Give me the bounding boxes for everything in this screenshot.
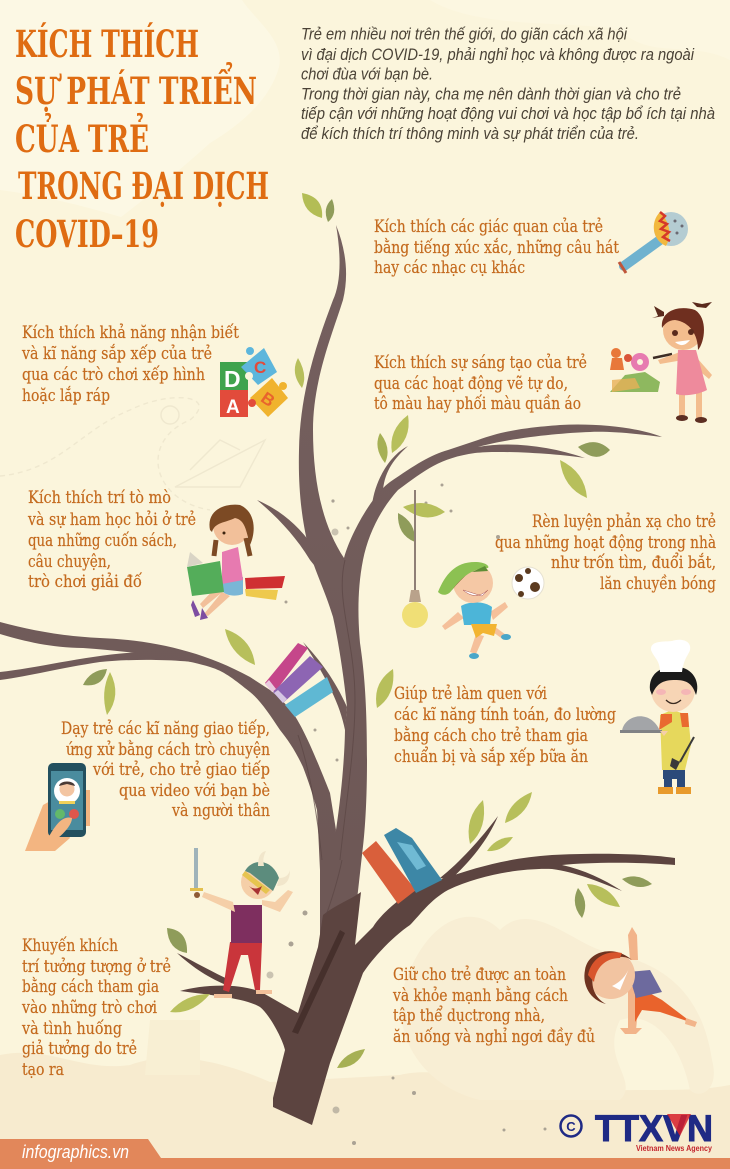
illustration: boy with ball — [438, 562, 544, 659]
title: SỰ PHÁT TRIỂN — [15, 62, 257, 113]
logo: copyright — [560, 1116, 582, 1136]
text: imagination: trí tưởng tượng ở trẻ — [22, 957, 171, 976]
text: creativity — [374, 353, 587, 413]
text: senses: hay các nhạc cụ khác — [374, 258, 525, 277]
logo: copyright: C — [566, 1119, 576, 1134]
icon: puzzle: C — [254, 358, 266, 377]
icon: phone call — [25, 763, 90, 851]
text: curiosity: Kích thích trí tò mò — [28, 488, 171, 507]
illustration: chef — [620, 640, 697, 794]
text: communication: qua video với bạn bè — [119, 781, 270, 800]
text: imagination: giả tưởng do trẻ — [22, 1039, 137, 1058]
text: curiosity — [27, 488, 196, 591]
text: maths: các kĩ năng tính toán, đo lường — [394, 705, 616, 724]
text: imagination: Khuyến khích — [22, 936, 118, 955]
text: imagination — [21, 936, 171, 1079]
text: reflexes — [495, 512, 716, 593]
illustration: stack of books upper — [265, 643, 333, 717]
text: health: Giữ cho trẻ được an toàn — [393, 965, 566, 984]
intro text: chơi đùa với bạn bè. — [301, 66, 433, 84]
intro text: để kích thích trí thông minh và sự phát triển của trẻ. — [301, 125, 639, 143]
logo: TTXVN: Vietnam News Agency — [636, 1144, 712, 1153]
text: puzzles — [21, 323, 239, 405]
footer bar: infographics.vn — [22, 1141, 129, 1162]
text: maths: bằng cách cho trẻ tham gia — [394, 726, 588, 745]
text: puzzles: và kĩ năng sắp xếp của trẻ — [21, 344, 212, 363]
leaves — [83, 193, 652, 1068]
footer bar — [0, 1139, 730, 1169]
text: imagination: bằng cách tham gia — [22, 977, 159, 996]
title: CỦA TRẺ — [15, 113, 149, 161]
text: curiosity: qua những cuốn sách, — [28, 531, 177, 550]
text: curiosity: và sự ham học hỏi ở trẻ — [27, 510, 196, 529]
text: maths: chuẩn bị và sắp xếp bữa ăn — [394, 747, 588, 766]
illustration: exercising kid — [584, 927, 697, 1034]
illustration: reading girl — [187, 505, 285, 620]
text: communication: với trẻ, cho trẻ giao tiếp — [92, 760, 270, 779]
intro text: vì đại dịch COVID-19, phải nghỉ học và không được ra ngoài — [301, 46, 695, 64]
tree — [0, 225, 675, 1125]
icon: puzzle — [220, 347, 288, 418]
text: health: tập thể dụctrong nhà, — [393, 1006, 545, 1025]
text: puzzles: Kích thích khả năng nhận biết — [22, 323, 239, 342]
text: communication: Dạy trẻ các kĩ năng giao tiếp, — [61, 719, 270, 738]
icon: puzzle: D — [224, 366, 241, 392]
title — [15, 22, 269, 256]
intro text: Trẻ em nhiều nơi trên thế giới, do giãn cách xã hội — [301, 26, 628, 44]
text: creativity: tô màu hay phối màu quần áo — [374, 394, 581, 413]
text: communication — [61, 719, 270, 820]
text: imagination: và tình huống — [21, 1019, 122, 1038]
icon: puzzle: A — [226, 397, 240, 418]
intro text: Trong thời gian này, cha mẹ nên dành thời gian và cho trẻ — [301, 86, 681, 104]
text: communication: và người thân — [171, 801, 270, 820]
icon: rattle — [619, 212, 688, 273]
illustration: viking boy — [190, 848, 293, 998]
text: curiosity: trò chơi giải đố — [28, 572, 143, 591]
text: curiosity: câu chuyện, — [28, 552, 111, 571]
text: senses — [374, 217, 619, 277]
intro text — [301, 26, 715, 143]
illustration: stack of books lower — [362, 828, 442, 904]
text: health: ăn uống và nghỉ ngơi đầy đủ — [393, 1027, 595, 1046]
text: imagination: tạo ra — [22, 1060, 64, 1079]
text: creativity: Kích thích sự sáng tạo của trẻ — [374, 353, 587, 372]
text: puzzles: hoặc lắp ráp — [22, 386, 110, 405]
title: KÍCH THÍCH — [15, 22, 199, 66]
text: senses: Kích thích các giác quan của trẻ — [374, 217, 603, 236]
logo: TTXVN: TTXVN — [595, 1108, 713, 1149]
text: creativity: qua các hoạt động vẽ tự do, — [374, 374, 568, 393]
text: maths: Giúp trẻ làm quen với — [394, 684, 547, 703]
text: senses: bằng tiếng xúc xắc, những câu hát — [374, 238, 619, 257]
title: COVID–19 — [15, 212, 159, 256]
text: imagination: vào những trò chơi — [21, 998, 157, 1017]
text: health: và khỏe mạnh bằng cách — [392, 986, 568, 1005]
icon: light bulb — [402, 490, 428, 628]
text: puzzles: qua các trò chơi xếp hình — [22, 365, 205, 384]
illustration: painting girl — [610, 302, 712, 423]
icon: puzzle: B — [257, 388, 278, 411]
text: health — [392, 965, 595, 1046]
text: communication: ứng xử bằng cách trò chuyện — [66, 740, 270, 759]
title: TRONG ĐẠI DỊCH — [18, 164, 269, 208]
text: maths — [394, 684, 616, 766]
